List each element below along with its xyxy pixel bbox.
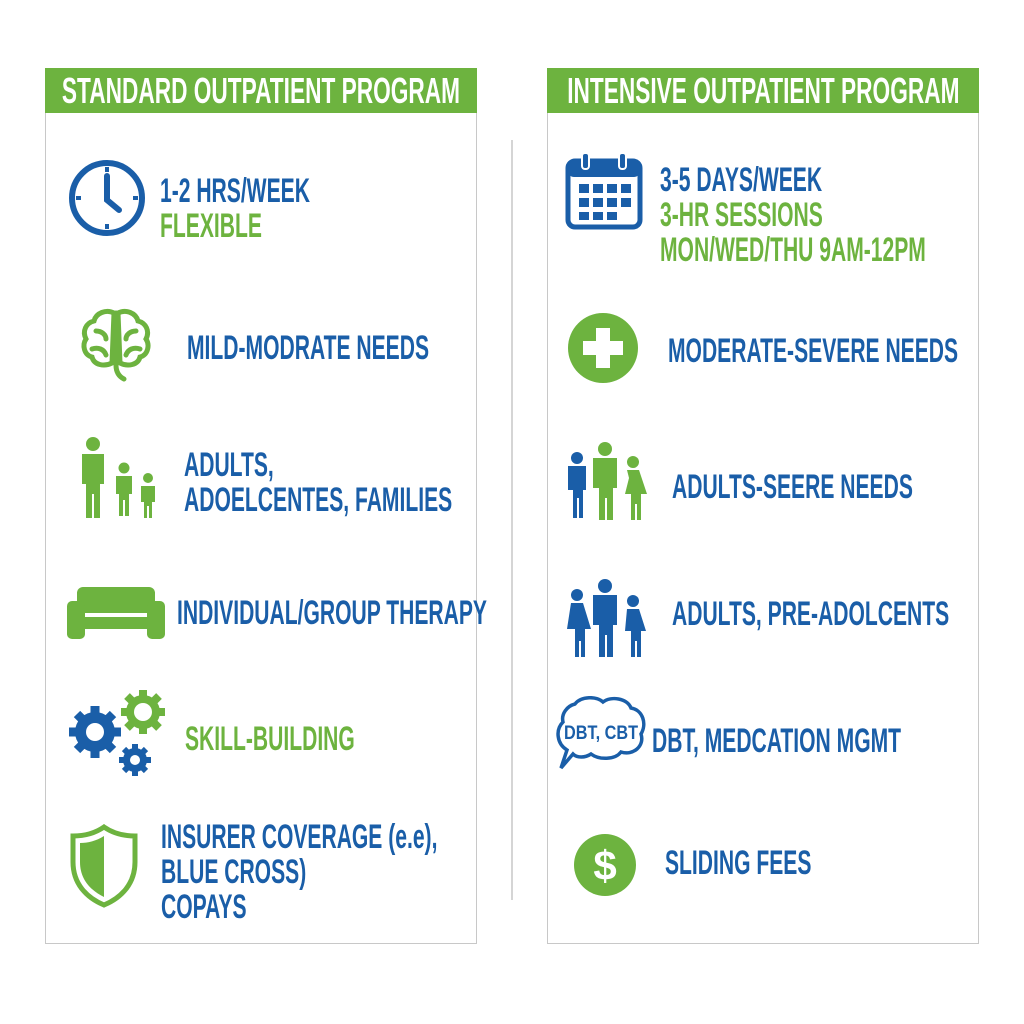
panel: standard outpatient	[45, 68, 477, 944]
text: days/week: 3-5 DAYS/WEEK	[660, 161, 822, 199]
text: days/week	[660, 161, 926, 269]
text: adults pre-adolescents: ADULTS, PRE-ADOLCENTS	[672, 595, 949, 633]
text: adults families: ADOELCENTES, FAMILIES	[184, 481, 452, 519]
text: insurance: INSURER COVERAGE (e.e),	[161, 818, 437, 856]
icon: family green	[82, 437, 155, 518]
icon: brain	[81, 308, 151, 382]
text: dbt medication: DBT, MEDCATION MGMT	[652, 722, 901, 760]
text: therapy: INDIVIDUAL/GROUP THERAPY	[177, 594, 487, 632]
text: sliding fees: SLIDING FEES	[665, 844, 811, 882]
text: adults families	[184, 446, 452, 519]
text: insurance: BLUE CROSS)	[161, 853, 306, 891]
icon: plus circle	[568, 313, 638, 383]
icon: couch	[67, 587, 165, 639]
text: days/week: 3-HR SESSIONS	[660, 196, 823, 234]
panel: intensive outpatient	[547, 68, 979, 944]
text: adults severe: ADULTS-SEERE NEEDS	[672, 468, 913, 506]
icon: family blue	[567, 579, 646, 657]
icon: family mixed	[568, 442, 647, 520]
text: insurance	[161, 818, 437, 926]
text: insurance: COPAYS	[161, 888, 247, 926]
icon: speech bubble	[556, 696, 646, 770]
icon: shield	[70, 824, 138, 908]
text: hours: FLEXIBLE	[160, 207, 262, 245]
text: days/week: MON/WED/THU 9AM-12PM	[660, 231, 926, 269]
heading: intensive: INTENSIVE OUTPATIENT PROGRAM	[567, 70, 959, 111]
heading: standard: STANDARD OUTPATIENT PROGRAM	[62, 70, 460, 111]
icon: gears	[69, 690, 165, 776]
text: adults families: ADULTS,	[184, 446, 274, 484]
text: hours	[160, 172, 310, 245]
text: mild-moderate: MILD-MODRATE NEEDS	[187, 329, 429, 367]
icon: dollar circle	[574, 834, 636, 896]
icon: calendar	[566, 154, 642, 230]
text: hours: 1-2 HRS/WEEK	[160, 172, 310, 210]
text: moderate-severe: MODERATE-SEVERE NEEDS	[668, 332, 958, 370]
text: skill-building: SKILL-BUILDING	[185, 720, 355, 758]
icon: clock	[69, 160, 145, 236]
icon: dollar circle: $	[593, 842, 617, 889]
